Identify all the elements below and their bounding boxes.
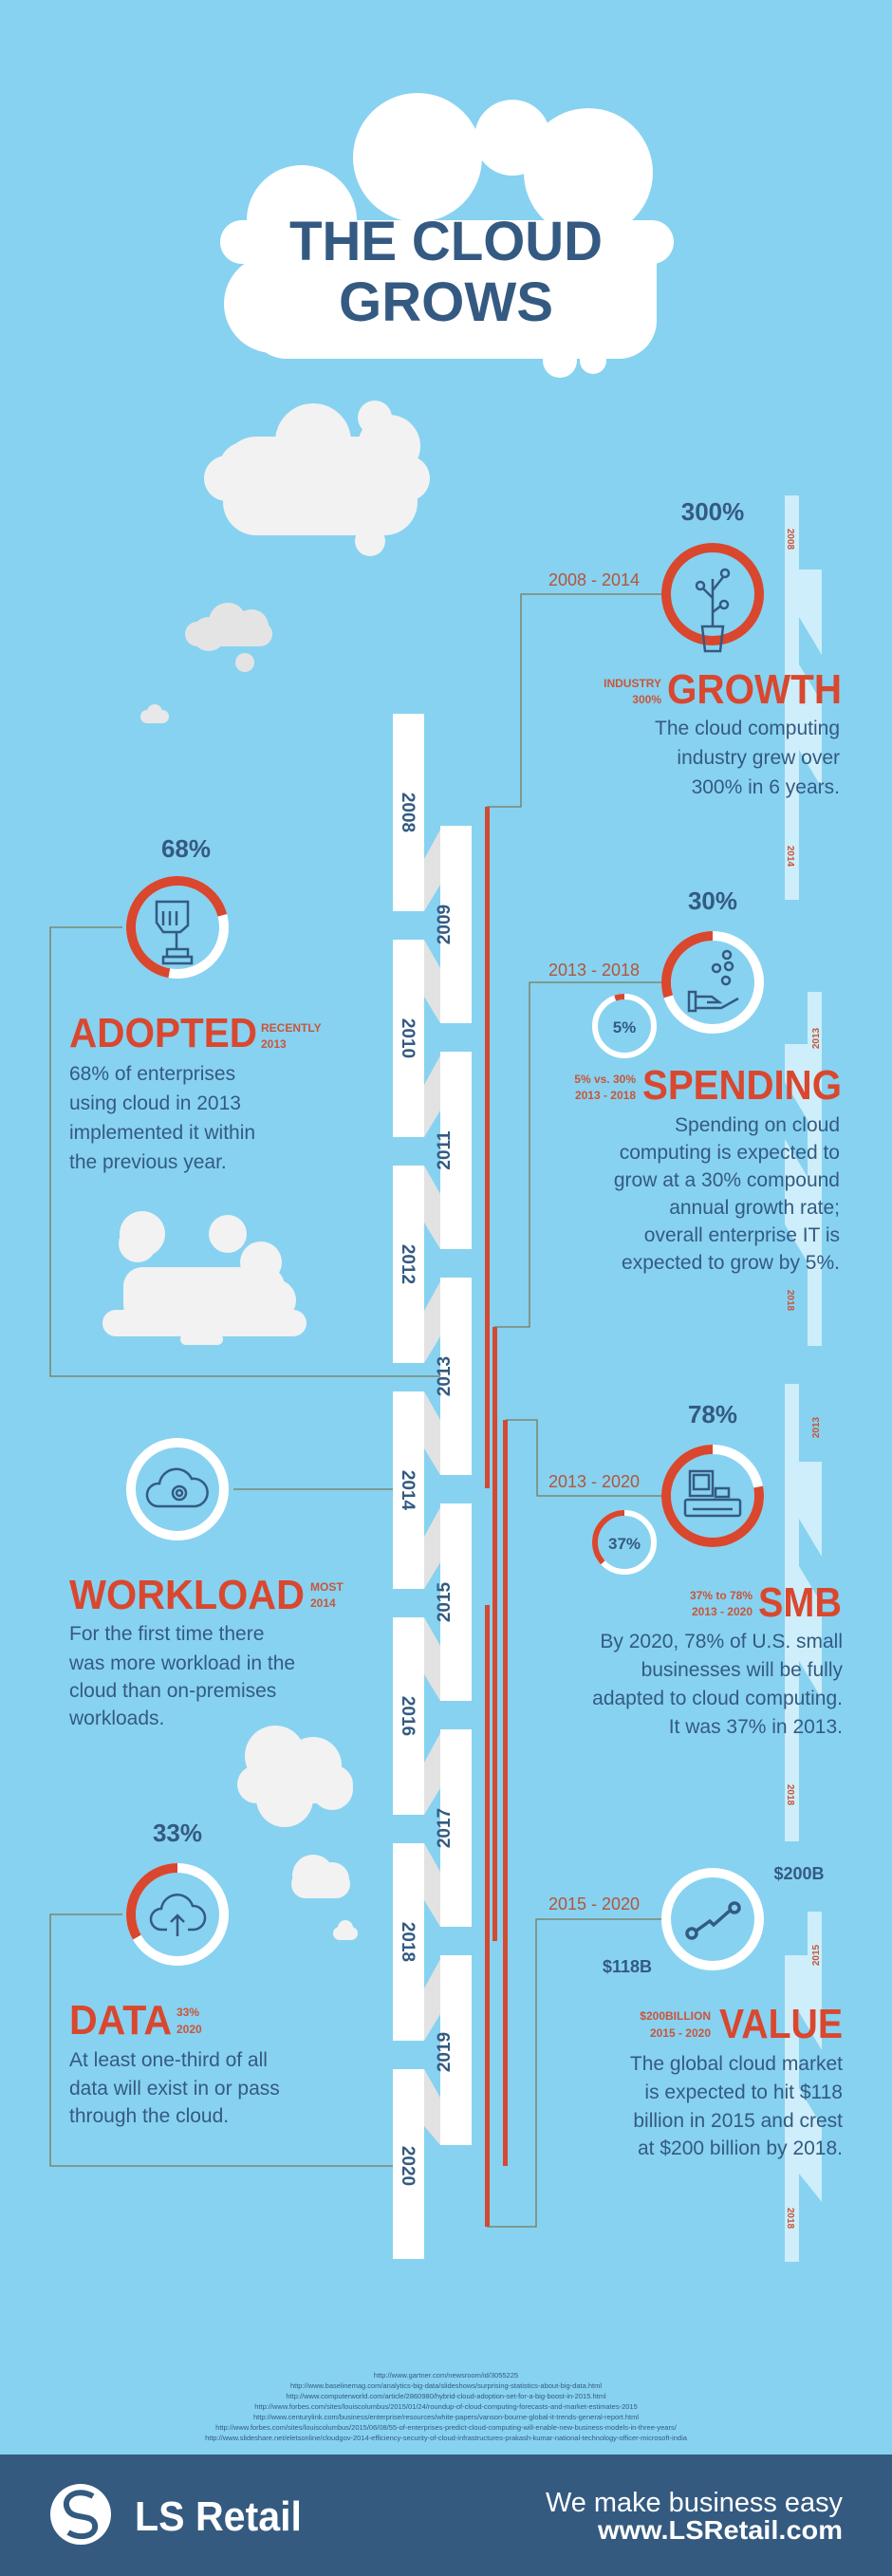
references: http://www.forbes.com/sites/louiscolumbus/2015/06/08/55-of-enterprises-predict-cloud-computing-will-enable-new-business-models-in-three-years/ [215,2423,678,2432]
heading: adopted: RECENTLY [261,1021,322,1035]
title cloud: THE CLOUD [289,211,603,272]
donut: 78% [666,1449,759,1542]
year strip: 2011 [435,1130,455,1170]
heading: value [640,2001,843,2047]
panel: value: is expected to hit $118 [644,2081,843,2103]
panel: value [548,1864,843,2159]
text: 2018 [785,2208,795,2230]
panel: value: $200B [773,1864,825,1883]
references: http://www.forbes.com/sites/louiscolumbus/2015/01/24/roundup-of-cloud-computing-forecasts-and-market-estimates-2015 [254,2402,638,2411]
text: 2018 [785,1290,795,1312]
timeline bars and connectors [50,594,661,2227]
panel: smb: It was 37% in 2013. [669,1716,843,1738]
heading: growth [604,666,842,713]
year strip: 2010 [398,1018,418,1058]
panel: adopted: using cloud in 2013 [69,1092,241,1114]
donut: 37%: 37% [608,1535,641,1553]
panel: data: 33% [153,1819,202,1847]
panel: adopted: 68% [161,834,211,863]
panel: workload: was more workload in the [68,1652,295,1674]
heading: spending: SPENDING [642,1062,842,1109]
panel: data [69,1819,280,2127]
panel: smb: 78% [688,1400,737,1428]
footer [0,2455,892,2576]
tagline: www.LSRetail.com [597,2515,843,2545]
heading: growth: GROWTH [667,666,842,713]
cloud: decorative 3 [185,603,272,672]
heading: workload: MOST [310,1580,344,1594]
donut: 68% [121,870,234,984]
panel: adopted: the previous year. [69,1151,227,1173]
cloud: decorative 2 [204,401,430,556]
panel: spending: expected to grow by 5%. [622,1252,840,1274]
panel: growth: 300% in 6 years. [692,776,840,798]
panel: spending: overall enterprise IT is [644,1224,840,1246]
logo: LS Retail: LS Retail [135,2493,302,2540]
references: http://www.centurylink.com/business/enterprise/resources/white-papers/vanson-bourne-global-it-trends-general-report.html [253,2413,639,2421]
cloud: small near data [291,1855,350,1898]
references: http://www.baselinemag.com/analytics-big-data/slideshows/surprising-statistics-about-big-data.html [290,2381,602,2390]
year strip: 2018 [398,1922,418,1962]
panel: growth: 300% [681,497,744,526]
panel: spending: computing is expected to [620,1142,840,1164]
donut: 5% [595,997,654,1055]
panel: spending: Spending on cloud [675,1114,840,1136]
text: 2014 [785,846,795,868]
heading: spending: 2013 - 2018 [575,1089,636,1102]
panel: value: at $200 billion by 2018. [638,2137,843,2159]
year strip [393,714,472,2259]
panel: growth [548,497,842,798]
panel: spending: 2013 - 2018 [548,961,640,980]
heading: value: 2015 - 2020 [650,2026,711,2040]
heading: growth: INDUSTRY [604,677,661,690]
panel: spending: annual growth rate; [669,1197,840,1219]
title cloud [220,93,674,378]
cloud: tiny near data [333,1920,358,1940]
cloud: tiny [140,704,169,723]
panel: growth: industry grew over [677,747,840,769]
tagline [546,2488,843,2545]
year strip: 2015 [435,1581,455,1622]
icon: cloud gear ring [131,1443,224,1536]
panel: spending: 30% [688,887,737,915]
heading: growth: 300% [632,693,661,706]
heading: smb [690,1579,842,1626]
references: http://www.gartner.com/newsroom/id/3055225 [374,2371,518,2380]
panel: growth: The cloud computing [655,718,840,739]
cloud: decorative under adopted [102,1211,307,1345]
heading: workload: 2014 [310,1596,336,1610]
text: 2008 [785,529,795,551]
panel: smb: businesses will be fully [641,1659,843,1681]
panel: value: $118B [603,1957,652,1976]
heading: smb: SMB [758,1579,842,1626]
cloud: decorative near data [237,1726,353,1827]
heading: smb: 37% to 78% [690,1589,753,1602]
heading: workload: WORKLOAD [69,1572,305,1618]
text: 2018 [785,1784,795,1806]
heading: data: DATA [69,1997,172,2044]
heading: spending [574,1062,842,1109]
right ribbons [785,495,822,2262]
year strip: 2019 [435,2032,455,2072]
heading: value: $200BILLION [640,2009,711,2023]
year strip: 2016 [398,1696,418,1736]
donut: 30% [666,936,759,1029]
donut: growth 300% [666,548,759,651]
panel: workload: cloud than on-premises [69,1680,276,1702]
year strip: 2012 [398,1244,418,1284]
panel: smb [548,1400,843,1738]
icon: hand pressing button [157,902,192,963]
donut: 5%: 5% [613,1018,636,1036]
heading: value: VALUE [719,2001,843,2047]
panel: adopted [69,834,322,1345]
year strip: 2014 [398,1470,418,1511]
heading: smb: 2013 - 2020 [692,1605,753,1618]
year strip: 2009 [435,905,455,944]
heading: adopted: ADOPTED [69,1010,257,1056]
text: 2013 [811,1027,822,1049]
panel: value: billion in 2015 and crest [633,2110,843,2132]
icon: growth line ring [666,1873,759,1966]
year strip: 2017 [435,1808,455,1848]
panel: data: through the cloud. [69,2105,229,2127]
logo: LS Retail [50,2484,302,2545]
donut: 37% [595,1513,654,1572]
panel: growth: 2008 - 2014 [548,570,640,589]
text: 2015 [811,1944,822,1966]
year strip: 2008 [398,793,418,832]
icon: plant [697,569,729,651]
text: 2013 [811,1416,822,1438]
references: http://www.computerworld.com/article/2860980/hybrid-cloud-adoption-set-for-a-big-boost-in-2015.html [286,2392,606,2400]
heading: data: 2020 [177,2023,202,2036]
title cloud: GROWS [339,271,553,333]
panel: spending: grow at a 30% compound [614,1169,840,1191]
panel: workload: For the first time there [69,1623,264,1645]
panel: value: The global cloud market [630,2053,843,2075]
panel: spending [548,887,842,1274]
year strip: 2020 [398,2146,418,2186]
donut: 33% [131,1868,224,1961]
panel: workload: workloads. [68,1708,164,1729]
icon: cash register computer [685,1471,740,1516]
references: http://www.slideshare.net/eletsonline/cloudgov-2014-efficiency-security-of-cloud-infrastructures-prakash-kumar-national-technology-officer-microsoft-india [205,2434,688,2442]
panel: data: At least one-third of all [69,2049,268,2071]
panel: smb: 2013 - 2020 [548,1472,640,1491]
panel: data: data will exist in or pass [69,2078,280,2100]
panel: adopted: 68% of enterprises [69,1063,235,1085]
panel: smb: By 2020, 78% of U.S. small [600,1631,843,1652]
panel: workload [68,1443,344,1729]
icon: cloud upload [151,1895,205,1936]
heading: adopted: 2013 [261,1037,287,1051]
references [205,2371,688,2442]
heading: data: 33% [177,2006,199,2019]
tagline: We make business easy [546,2488,843,2518]
panel: adopted: implemented it within [69,1122,255,1144]
heading: spending: 5% vs. 30% [574,1073,636,1086]
year strip: 2013 [435,1356,455,1396]
icon: hand with coins [689,951,738,1011]
panel: value: 2015 - 2020 [548,1895,640,1913]
panel: smb: adapted to cloud computing. [592,1688,843,1709]
